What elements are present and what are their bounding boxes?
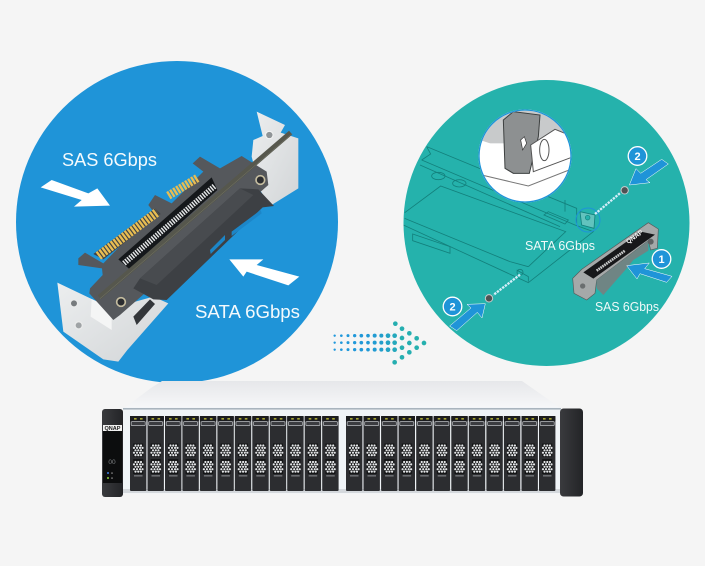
arrow: step 2 lower — [450, 304, 485, 331]
badge: 2 upper — [628, 147, 647, 165]
arrow: step 1 — [627, 263, 672, 282]
right drive bays — [346, 416, 555, 491]
arrow: step 2 upper — [629, 159, 668, 185]
screw lower — [485, 275, 520, 302]
tray line drawing — [403, 147, 593, 283]
left drive bays — [130, 416, 339, 491]
left metal bracket — [57, 283, 168, 362]
panel: teal circle with installation diagram — [403, 80, 690, 366]
lower SATA housing — [133, 188, 274, 300]
front chassis — [123, 408, 561, 494]
infographic canvas — [16, 61, 690, 497]
badge: 1: 1 — [658, 254, 665, 266]
connector photo — [41, 112, 299, 362]
upper SAS housing — [78, 156, 268, 320]
NAS server unit — [102, 381, 583, 497]
inset zoom circle — [477, 108, 577, 203]
badge: 2 lower: 2 — [449, 302, 456, 314]
screw upper — [595, 187, 628, 214]
left ear with logo: QNAP — [104, 426, 121, 432]
panel: blue circle with connector photo — [16, 61, 338, 383]
badge: 2 lower — [443, 297, 462, 316]
dotted arrow — [333, 321, 426, 365]
arrow: SATA — [229, 259, 299, 285]
badge: 2 upper: 2 — [634, 151, 641, 163]
server lid — [123, 381, 562, 409]
bracket tab — [576, 208, 600, 232]
right metal bracket — [252, 112, 298, 206]
label: SAS 6Gbps: SAS 6Gbps — [595, 300, 659, 314]
label: SAS 6Gbps: SAS 6Gbps — [62, 149, 157, 170]
circuit board edge — [99, 133, 291, 297]
brass screws — [117, 176, 265, 306]
left ear with logo: 00 — [108, 459, 116, 466]
label: SATA 6Gbps: SATA 6Gbps — [195, 301, 300, 322]
left ear with logo — [102, 409, 123, 497]
module logo text: QNAP — [625, 229, 645, 246]
arrow: SAS — [41, 180, 110, 207]
gold contacts — [93, 208, 161, 259]
right ear — [560, 408, 583, 496]
pin slot — [118, 177, 217, 269]
SAS adapter module — [573, 223, 658, 300]
label: SATA 6Gbps: SATA 6Gbps — [525, 239, 595, 253]
badge: 1 — [652, 250, 671, 268]
